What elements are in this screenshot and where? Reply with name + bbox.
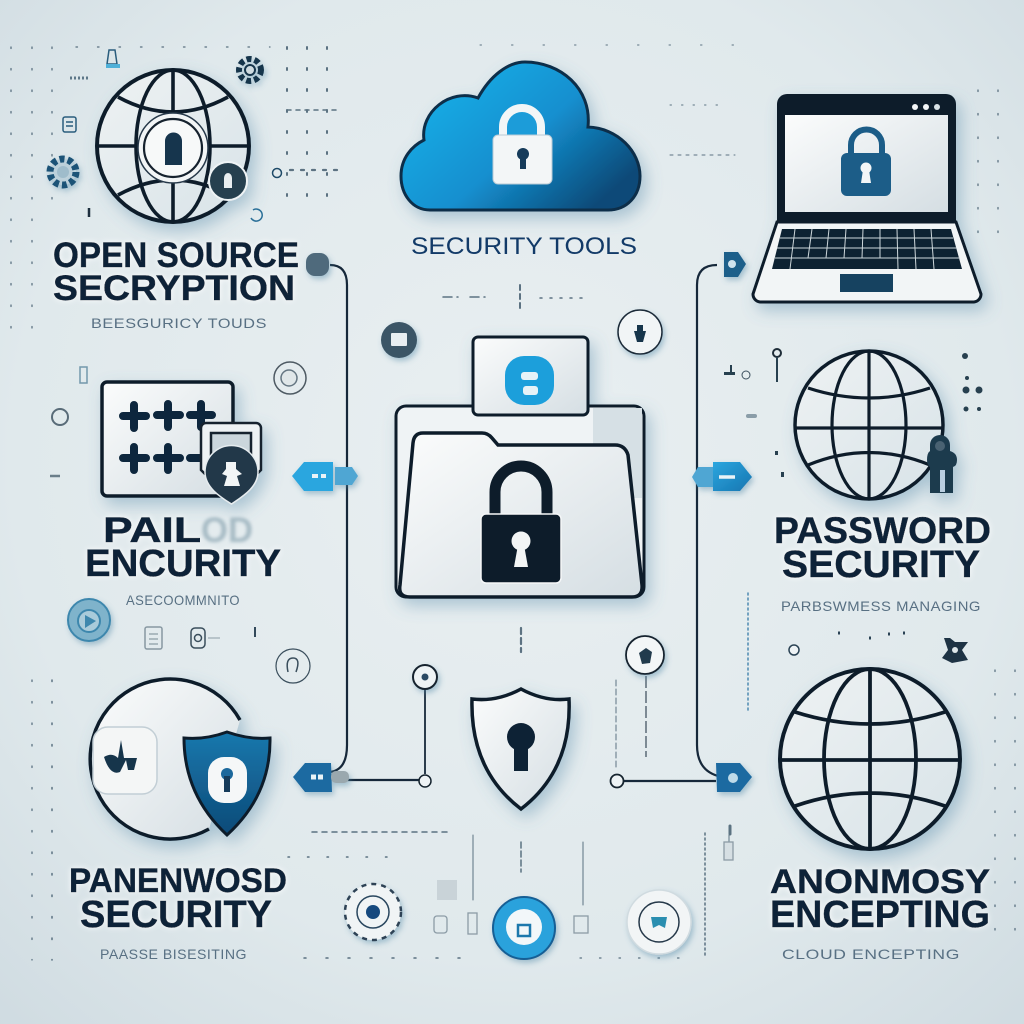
heading: security tools: SECURITY TOOLS	[411, 233, 637, 260]
small icons bottom centre	[434, 842, 733, 934]
heading: password security	[774, 510, 991, 586]
subtext: open source: BEESGURICY TOUDS	[91, 315, 267, 331]
icon: gear left	[50, 159, 76, 185]
circle icon left of folder	[381, 322, 417, 358]
icon: blue circle button	[493, 897, 555, 959]
icon: lens with shield	[90, 679, 270, 839]
heading: open source secryption	[53, 236, 299, 308]
node: blue middle right	[692, 462, 752, 491]
heading: panenwosd security: SECURITY	[80, 894, 272, 936]
icon: cloud with lock	[401, 62, 640, 210]
icons right lower	[789, 633, 968, 663]
subtext: panenwosd: PAASSE BISESITING	[100, 946, 247, 962]
small icons row	[145, 627, 310, 683]
node: blue middle left	[292, 462, 358, 491]
node: junction left	[419, 775, 431, 787]
left pin marks around connector	[50, 362, 306, 476]
icon: round emblem	[68, 599, 110, 641]
subtext: cloud encepting: CLOUD ENCEPTING	[782, 946, 960, 962]
node: circle above left junction	[413, 665, 437, 689]
heading: open source secryption: OPEN SOURCE	[53, 236, 299, 275]
node: circle with star	[626, 636, 664, 674]
heading: password security: PASSWORD	[774, 510, 991, 551]
icon: white circle badge	[627, 890, 691, 954]
icon: folder with lock	[396, 337, 644, 597]
small icons left top	[63, 50, 282, 221]
node: blue bottom right	[716, 763, 752, 792]
circle icon right of folder	[618, 310, 662, 354]
icon: security shield	[472, 689, 569, 809]
icon: globe with lock	[97, 70, 249, 222]
icon: bottom gear	[345, 884, 401, 940]
connector lines	[330, 265, 718, 781]
small icons right middle	[724, 349, 982, 477]
heading: pailod encurity	[85, 511, 281, 585]
icon: password panel	[102, 382, 261, 504]
heading: anonmosy encepting: ANONMOSY	[770, 863, 990, 901]
heading: password security: SECURITY	[782, 544, 980, 586]
heading: pailod encurity: PAIL	[103, 511, 201, 550]
icon: laptop with lock	[753, 94, 981, 302]
icon: large globe	[780, 669, 960, 849]
subtext: pailod: ASECOOMMNITO	[126, 592, 240, 608]
node: blue bottom left	[293, 763, 349, 792]
heading: pailod encurity: OD	[201, 511, 253, 550]
icon: gear top	[239, 59, 261, 81]
heading: pailod encurity: ENCURITY	[85, 543, 281, 585]
node: junction right	[610, 774, 624, 788]
node: top right	[724, 252, 746, 277]
heading: anonmosy encepting	[770, 863, 990, 936]
heading: anonmosy encepting: ENCEPTING	[770, 894, 990, 936]
heading: open source secryption: SECRYPTION	[53, 269, 295, 308]
subtext: password: PARBSWMESS MANAGING	[781, 598, 981, 614]
icon: globe with padlock	[795, 351, 957, 499]
node: top left	[306, 253, 329, 276]
heading: panenwosd security: PANENWOSD	[69, 862, 287, 900]
heading: panenwosd security	[69, 862, 287, 936]
